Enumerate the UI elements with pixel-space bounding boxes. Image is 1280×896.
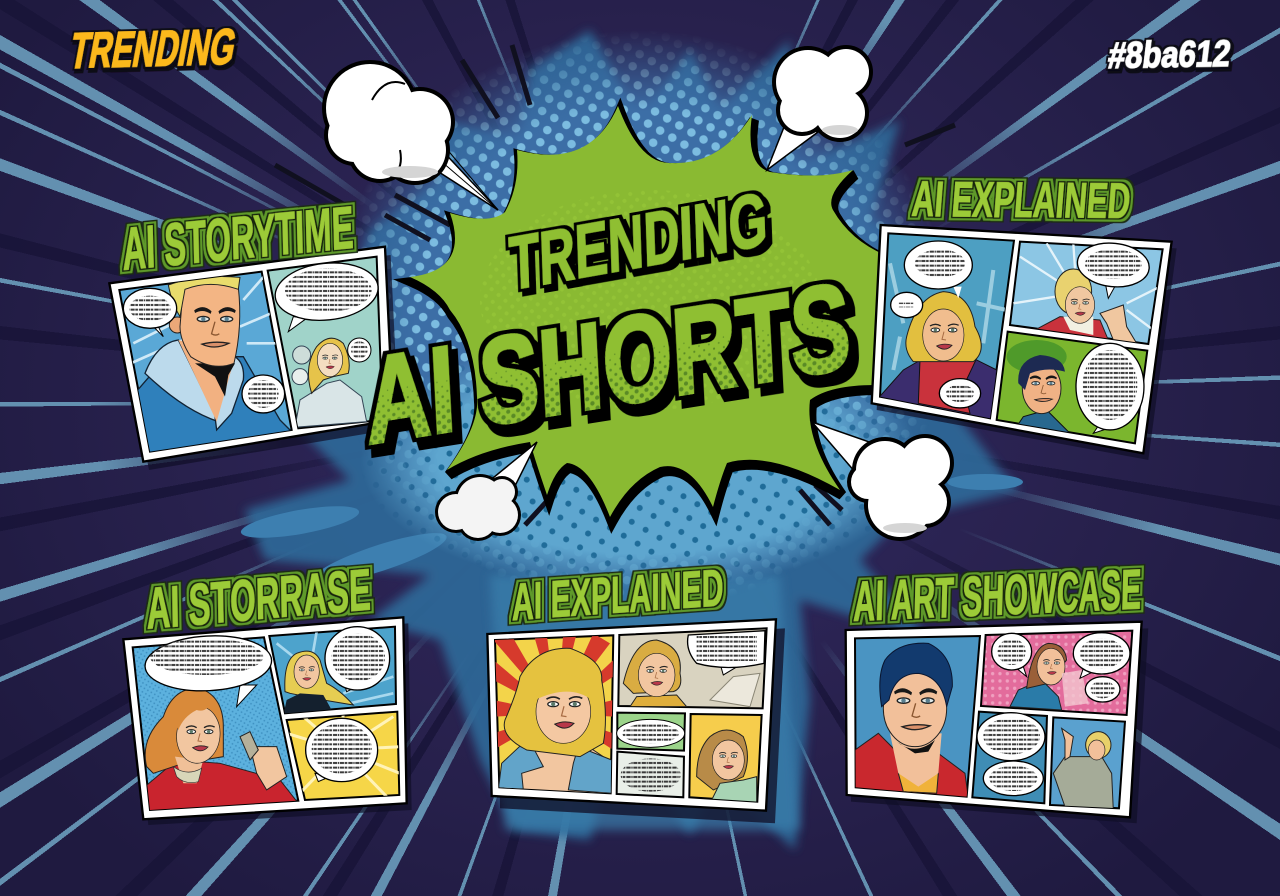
green starburst <box>410 106 892 522</box>
speech puff lower right <box>812 422 954 541</box>
speech bubble <box>1076 343 1144 433</box>
speech bubble <box>992 633 1032 677</box>
speech bubble <box>1073 633 1130 678</box>
speech bubble <box>983 761 1043 796</box>
speech puff top right <box>767 45 873 170</box>
speech bubble <box>688 631 765 675</box>
speech bubble <box>272 258 381 332</box>
speech bubble <box>1075 240 1151 298</box>
panel: AI Storytime comic <box>109 247 399 470</box>
speech puff top left <box>322 60 498 210</box>
corner tag: hash: #8ba612 <box>1106 32 1233 76</box>
speech bubble <box>1085 677 1120 702</box>
speech puff lower left <box>435 442 537 541</box>
speech bubble <box>144 633 273 707</box>
title: TRENDING in burst: TRENDING <box>508 177 769 306</box>
panel: AI Storrase comic <box>123 617 412 825</box>
label: AI EXPLAINED top right: AI EXPLAINED <box>910 171 1133 229</box>
panel: AI Explained comic bottom <box>487 619 785 823</box>
panel: AI Art Showcase comic <box>846 622 1148 823</box>
label: AI STORRASE: AI STORRASE <box>146 557 371 642</box>
speech bubble <box>325 627 390 692</box>
speech bubble <box>939 379 981 408</box>
corner tag: TRENDING: TRENDING <box>66 18 240 79</box>
speech bubble <box>123 288 177 337</box>
speech bubble <box>242 375 285 413</box>
blue splash behind the burst <box>239 30 1023 850</box>
speech bubble <box>977 713 1045 761</box>
title: AI SHORTS: AI SHORTS <box>362 256 853 470</box>
label: AI STORYTIME: AI STORYTIME <box>122 194 354 283</box>
speech bubble <box>348 338 371 362</box>
panel: AI Explained comic top right <box>872 225 1177 460</box>
label: AI EXPLAINED bottom: AI EXPLAINED <box>512 559 723 632</box>
speech bubble <box>904 241 972 298</box>
speech bubble <box>306 718 378 782</box>
speech bubble <box>617 719 685 747</box>
caption text <box>621 758 681 792</box>
speech bubble <box>891 292 923 318</box>
